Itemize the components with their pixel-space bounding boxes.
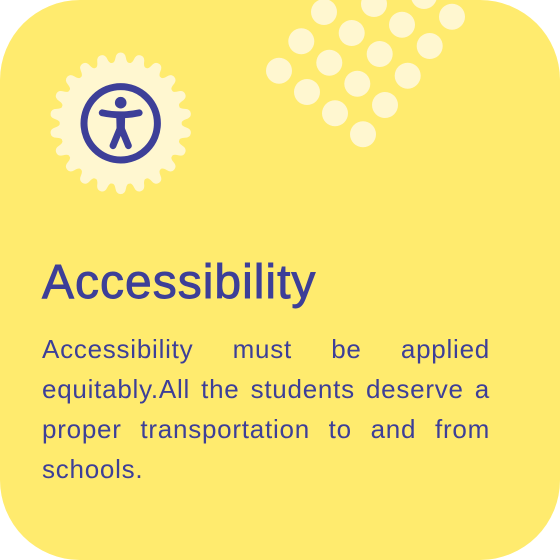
icon: scalloped badge bbox=[49, 52, 192, 194]
body text bbox=[42, 334, 490, 484]
icon: accessibility person in ring bbox=[84, 87, 157, 160]
decorative dot pattern bbox=[266, 0, 465, 147]
heading: Accessibility bbox=[42, 256, 316, 309]
body text: equitably.All the students deserve a bbox=[42, 374, 490, 404]
body text: proper transportation to and from bbox=[42, 414, 490, 444]
body text: schools. bbox=[42, 454, 143, 484]
body text: Accessibility must be applied bbox=[42, 334, 490, 364]
